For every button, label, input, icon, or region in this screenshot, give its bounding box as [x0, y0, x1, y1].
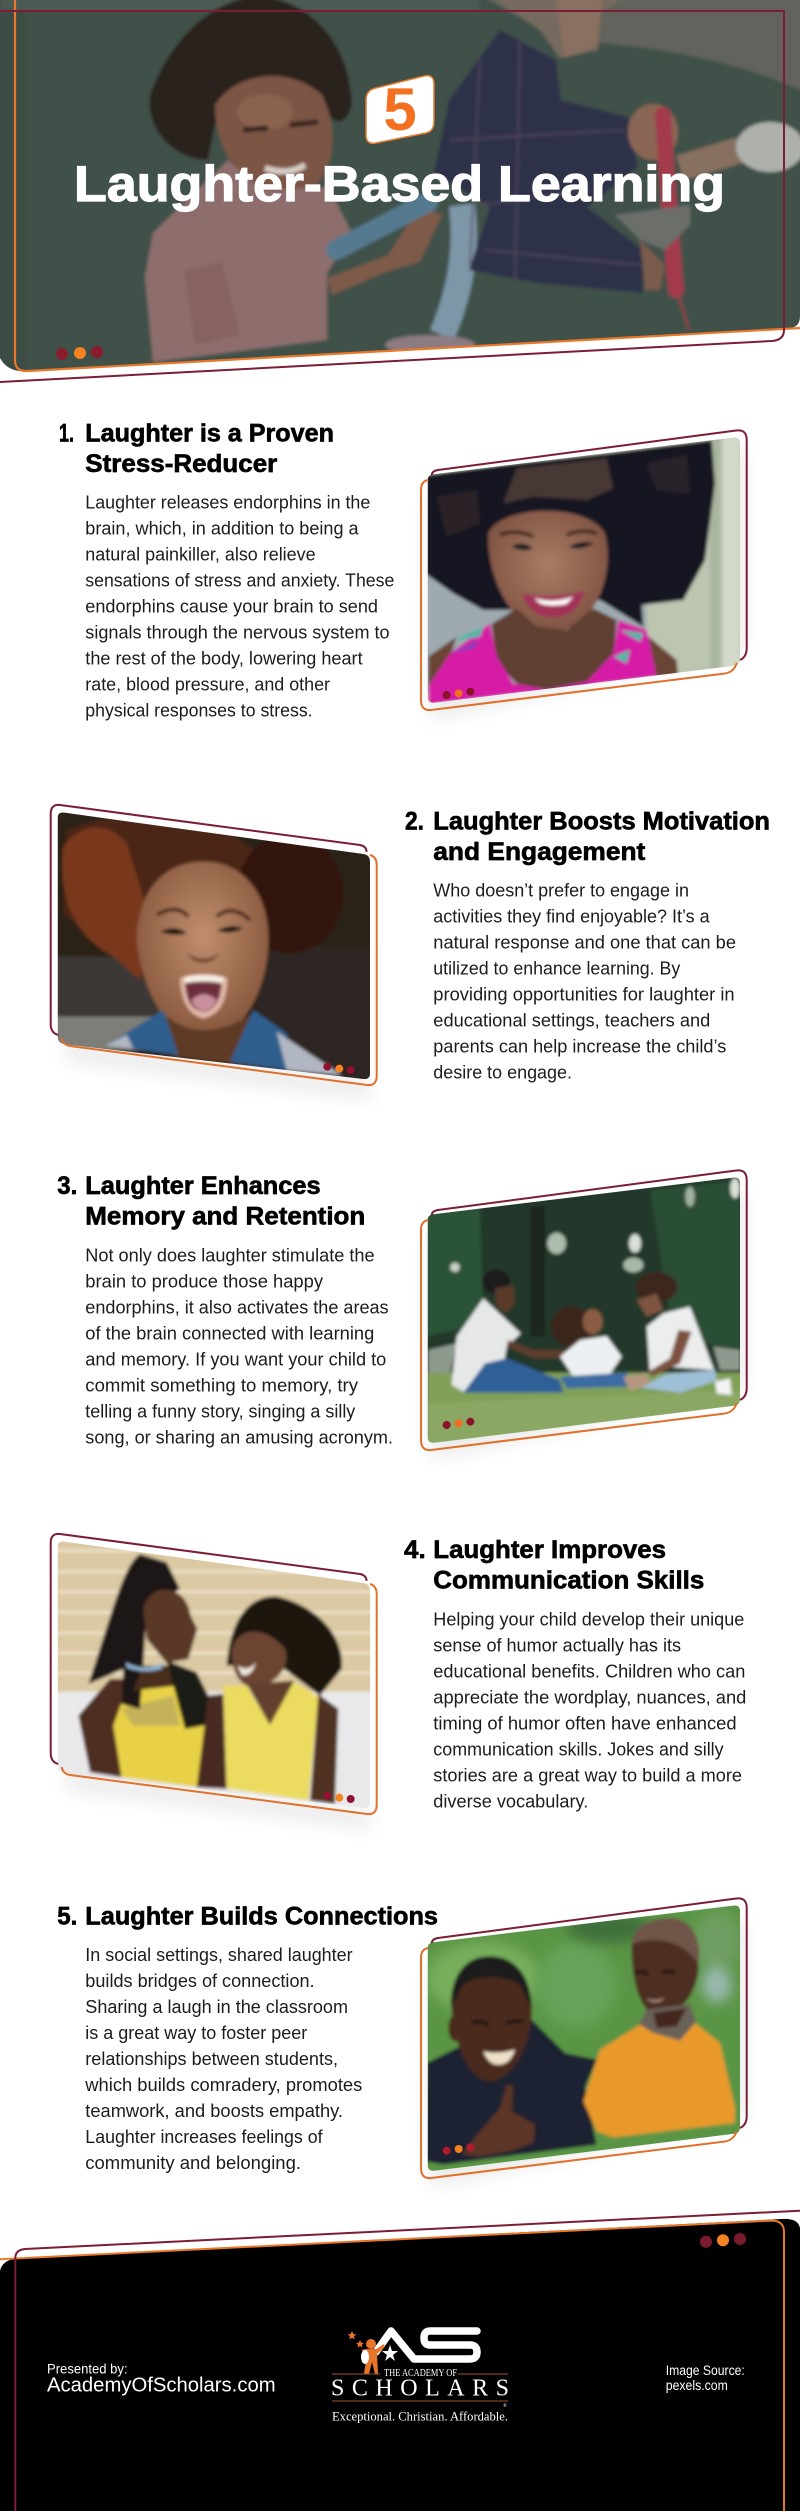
photo 1	[420, 430, 747, 710]
panel: section 4 text	[404, 1536, 746, 1811]
logo: The Academy of Scholars: ®	[503, 2403, 507, 2409]
body 4: educational benefits. Children who can	[433, 1661, 745, 1681]
blue balloon	[336, 202, 428, 250]
body 5: relationships between students,	[85, 2049, 338, 2069]
photo 2 orange frame	[62, 855, 377, 1085]
body 3: commit something to memory, try	[85, 1375, 358, 1395]
photo 3 dots	[443, 1418, 474, 1429]
left child hair	[149, 0, 352, 160]
photo 1 orange frame	[421, 480, 737, 710]
body 2: natural response and one that can be	[433, 933, 736, 953]
photo 1 dots	[443, 688, 474, 699]
photo 2 dots	[323, 1063, 355, 1074]
body 5: builds bridges of connection.	[85, 1971, 315, 1991]
photo 3	[428, 1178, 740, 1443]
heading 2	[405, 808, 770, 866]
image source: pexels.com	[666, 2378, 728, 2393]
body 5	[84, 1945, 362, 2173]
photo 4 dots	[323, 1792, 355, 1803]
header maroon frame line	[0, 11, 784, 382]
body 2: utilized to enhance learning. By	[433, 959, 680, 979]
body 3: Not only does laughter stimulate the	[85, 1245, 375, 1265]
body 2: educational settings, teachers and	[433, 1011, 710, 1031]
number badge: 5	[383, 76, 417, 143]
footer panel	[0, 2211, 800, 2511]
body 3: endorphins, it also activates the areas	[85, 1297, 389, 1317]
body 4: diverse vocabulary.	[433, 1791, 588, 1811]
header dots	[56, 346, 103, 360]
logo figure	[348, 2331, 385, 2374]
body 4: Helping your child develop their unique	[433, 1609, 744, 1629]
header panel	[0, 0, 800, 385]
body 5: Sharing a laugh in the classroom	[85, 1997, 348, 2017]
heading 3: Laughter Enhances	[85, 1172, 321, 1200]
logo: The Academy of Scholars: THE ACADEMY OF	[384, 2368, 457, 2379]
photo card 1: smiling girl with curly hair	[420, 430, 747, 720]
photo 4	[53, 1536, 377, 1812]
heading 3: Memory and Retention	[85, 1203, 365, 1231]
body 2: desire to engage.	[433, 1063, 572, 1083]
heading 1: Laughter is a Proven	[85, 420, 334, 448]
body 3: and memory. If you want your child to	[85, 1349, 386, 1369]
photo 5 orange frame	[421, 1948, 737, 2178]
body 2: providing opportunities for laughter in	[433, 985, 735, 1005]
heading 4: Communication Skills	[433, 1567, 704, 1595]
body 3	[85, 1245, 393, 1447]
presented by: Presented by:	[47, 2362, 128, 2376]
heading 5: Laughter Builds Connections	[85, 1903, 438, 1931]
photo 5 maroon frame	[432, 1898, 747, 2128]
photo 4 orange frame	[62, 1584, 377, 1814]
body 3: song, or sharing an amusing acronym.	[85, 1427, 393, 1447]
heading 2: 2.	[405, 808, 424, 836]
heading 1: 1.	[59, 420, 74, 448]
heading 3: 3.	[57, 1172, 77, 1200]
body 1: Laughter releases endorphins in the	[85, 492, 370, 512]
logo AS mark	[376, 2331, 477, 2359]
body 1: brain, which, in addition to being a	[85, 518, 360, 538]
body 3: brain to produce those happy	[85, 1271, 323, 1291]
body 1: rate, blood pressure, and other	[85, 674, 330, 694]
logo: The Academy of Scholars: Exceptional. Christian. Affordable.	[332, 2410, 508, 2424]
body 5: which builds comradery, promotes	[84, 2075, 362, 2095]
number badge	[366, 76, 434, 143]
header photo: children playing with balloons	[0, 0, 800, 385]
right child head	[490, 0, 625, 58]
panel: section 2 text	[405, 808, 770, 1083]
left child face	[215, 76, 332, 196]
photo 5	[428, 1906, 740, 2171]
heading 1	[59, 420, 334, 478]
heading 3	[57, 1172, 365, 1231]
body 4: appreciate the wordplay, nuances, and	[433, 1687, 746, 1707]
body 1: the rest of the body, lowering heart	[85, 648, 363, 668]
body 2: activities they find enjoyable? It’s a	[433, 907, 711, 927]
body 3: telling a funny story, singing a silly	[85, 1401, 355, 1421]
left child shirt	[145, 160, 352, 362]
body 5: teamwork, and boosts empathy.	[85, 2101, 343, 2121]
photo 2	[53, 807, 377, 1087]
photo 2 maroon frame	[51, 805, 367, 1035]
body 5: is a great way to foster peer	[85, 2023, 307, 2043]
photo 3 orange frame	[421, 1220, 737, 1450]
right child hand and red balloon	[628, 104, 678, 160]
image source: Image Source:	[666, 2363, 745, 2378]
right child leg and shoe	[680, 150, 740, 168]
body 4: timing of humor often have enhanced	[433, 1713, 737, 1733]
panel: section 1 text	[59, 420, 394, 720]
heading 4	[404, 1536, 704, 1595]
body 4: communication skills. Jokes and silly	[433, 1739, 724, 1759]
logo: The Academy of Scholars	[331, 2331, 509, 2424]
logo: The Academy of Scholars: SCHOLARS	[331, 2376, 509, 2402]
body 5: Laughter increases feelings of	[85, 2127, 324, 2147]
image source	[666, 2363, 745, 2393]
body 4	[433, 1609, 746, 1811]
panel: section 5 text	[57, 1903, 438, 2173]
photo card 3: family on the grass	[420, 1163, 747, 1460]
footer maroon frame line	[15, 2211, 800, 2511]
photo card 4: two girls in yellow	[51, 1534, 377, 1829]
presented by: AcademyOfScholars.com	[47, 2374, 276, 2396]
body 1: physical responses to stress.	[85, 700, 313, 720]
body 2	[433, 881, 736, 1083]
body 4: stories are a great way to build a more	[433, 1765, 742, 1785]
panel: section 3 text	[57, 1172, 393, 1447]
heading 4: Laughter Improves	[433, 1536, 666, 1564]
header orange frame line	[15, 0, 800, 371]
heading 2: Laughter Boosts Motivation	[433, 808, 770, 836]
body 5: In social settings, shared laughter	[85, 1945, 353, 1965]
body 1: endorphins cause your brain to send	[85, 596, 378, 616]
presented by	[47, 2362, 276, 2396]
title: Laughter-Based Learning	[74, 156, 725, 212]
body 3: of the brain connected with learning	[85, 1323, 374, 1343]
body 5: community and belonging.	[85, 2153, 301, 2173]
heading 4: 4.	[404, 1536, 426, 1564]
body 2: Who doesn’t prefer to engage in	[433, 881, 689, 901]
photo 3 maroon frame	[432, 1170, 747, 1400]
heading 2: and Engagement	[433, 838, 646, 866]
body 4: sense of humor actually has its	[433, 1635, 681, 1655]
footer dots	[700, 2233, 746, 2248]
photo card 5: man and boy	[420, 1898, 747, 2188]
logo star	[382, 2345, 398, 2361]
photo 4 maroon frame	[51, 1534, 367, 1764]
right child shirt	[434, 30, 643, 293]
body 1: sensations of stress and anxiety. These	[85, 570, 394, 590]
body 2: parents can help increase the child’s	[433, 1037, 726, 1057]
footer orange frame line	[0, 2221, 784, 2511]
photo 5 dots	[443, 2143, 474, 2155]
body 1	[85, 492, 394, 720]
body 1: natural painkiller, also relieve	[85, 544, 316, 564]
photo card 2: laughing child	[51, 805, 377, 1100]
footer black background	[0, 2219, 800, 2511]
heading 1: Stress-Reducer	[85, 450, 278, 478]
body 1: signals through the nervous system to	[85, 622, 390, 642]
left child lower arm	[184, 262, 240, 345]
photo 1 maroon frame	[432, 430, 747, 660]
heading 5: 5.	[57, 1903, 77, 1931]
